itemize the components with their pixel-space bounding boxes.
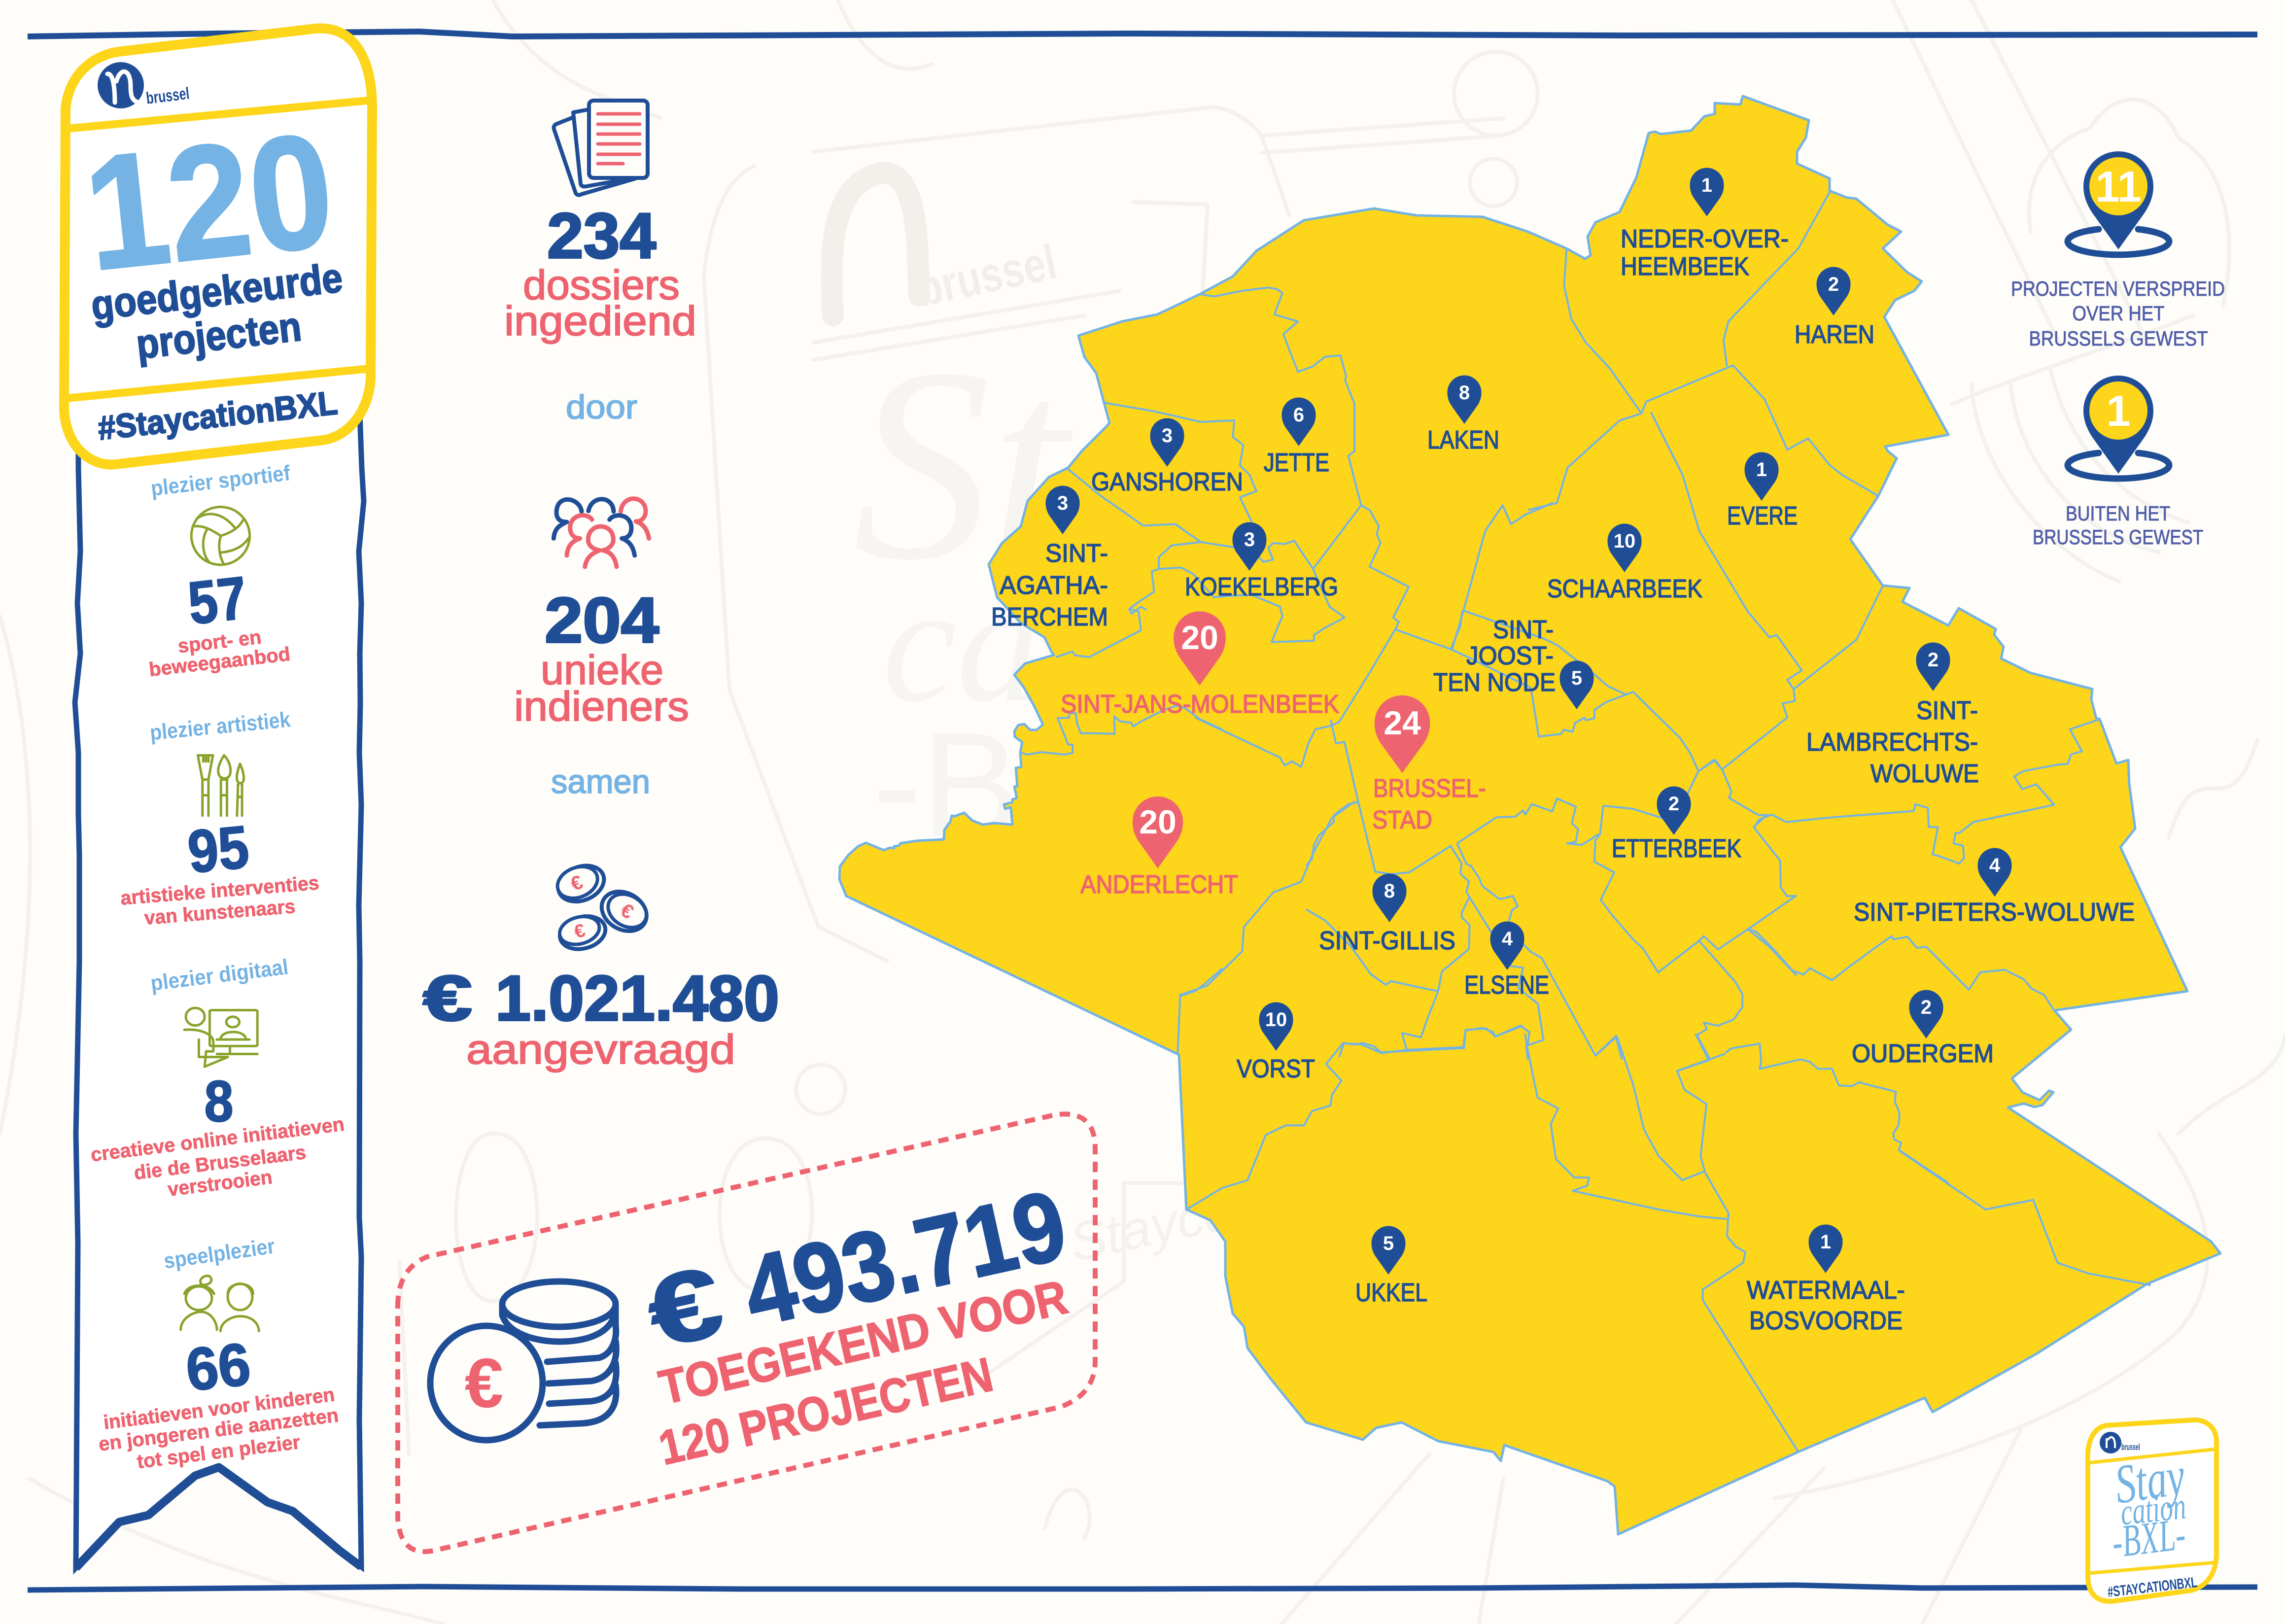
logo wordmark bbox=[2109, 1445, 2188, 1567]
number 234: 234 bbox=[547, 200, 656, 272]
ribbon panel bbox=[75, 414, 364, 1568]
icon: pin 11: 11 bbox=[2095, 162, 2142, 211]
map: municipality labels: JETTE bbox=[1264, 449, 1329, 477]
map: blue location pins: 3 bbox=[1057, 492, 1068, 514]
map: municipality labels: OUDERGEM bbox=[1852, 1039, 1994, 1068]
map: blue location pins: 1 bbox=[1756, 459, 1767, 481]
map: municipality labels: SINT- bbox=[1493, 616, 1554, 644]
icon: coin stack: € bbox=[465, 1344, 503, 1422]
icon: children bbox=[181, 1276, 259, 1331]
map: municipality labels: WOLUWE bbox=[1870, 760, 1979, 788]
logo mark bbox=[2100, 1432, 2121, 1453]
legend: projects outside Brussels region: BRUSSELS GEWEST bbox=[2033, 525, 2203, 549]
callout: awarded amount: 120 PROJECTEN bbox=[654, 1347, 998, 1475]
map: municipality labels: KOEKELBERG bbox=[1185, 573, 1338, 601]
icon: pin 1 bbox=[2068, 376, 2169, 479]
map: municipality labels: SINT-JANS-MOLENBEEK bbox=[1061, 690, 1339, 719]
icon: people bbox=[554, 499, 649, 567]
description: sport- en bbox=[177, 626, 262, 657]
map: blue location pins: 2 bbox=[1928, 649, 1939, 671]
map of Brussels bbox=[839, 96, 2220, 1534]
amount requested: € bbox=[423, 962, 472, 1034]
map: municipality labels: BRUSSEL- bbox=[1373, 774, 1486, 803]
icon: documents bbox=[554, 101, 648, 195]
map: municipality labels: NEDER-OVER- bbox=[1621, 225, 1789, 253]
ribbon shape bbox=[75, 414, 364, 1568]
map: blue location pins: 4 bbox=[1989, 855, 2001, 876]
number 8: 8 bbox=[204, 1069, 234, 1134]
category: plezier artistiek bbox=[120, 707, 320, 929]
stat: dossiers bbox=[504, 101, 696, 344]
map: blue location pins: 2 bbox=[1828, 274, 1839, 295]
icon: coins: € bbox=[617, 899, 637, 924]
dashed frame bbox=[398, 1114, 1095, 1552]
map: municipality labels: EVERE bbox=[1727, 502, 1798, 530]
logo wordmark: Stay bbox=[2111, 1445, 2188, 1516]
legend text: PROJECTEN VERSPREID bbox=[2011, 277, 2225, 300]
label: unieke bbox=[541, 647, 663, 693]
map: municipality labels bbox=[991, 225, 2135, 1335]
amount awarded: 493.719 bbox=[734, 1170, 1075, 1348]
number 95: 95 bbox=[185, 813, 252, 886]
small Staycation BXL logo bbox=[2088, 1420, 2216, 1601]
category: speelplezier: speelplezier bbox=[162, 1234, 277, 1274]
category: plezier digitaal: die de Brusselaars bbox=[133, 1141, 307, 1184]
category: plezier artistiek: van kunstenaars bbox=[143, 896, 296, 929]
map: municipality labels: LAKEN bbox=[1427, 426, 1499, 454]
connector: samen: samen bbox=[551, 763, 650, 800]
logo hashtag: #STAYCATIONBXL bbox=[2107, 1574, 2198, 1600]
headline number 120: 120 bbox=[77, 99, 341, 305]
amount awarded bbox=[638, 1170, 1075, 1369]
map: municipality labels: UKKEL bbox=[1355, 1278, 1427, 1307]
amount awarded: € bbox=[638, 1246, 731, 1369]
legend: projects across Brussels region: OVER HET bbox=[2072, 302, 2165, 325]
label: dossiers bbox=[523, 262, 680, 308]
map: municipality labels: SINT-GILLIS bbox=[1319, 927, 1455, 955]
map: municipality labels: WATERMAAL- bbox=[1747, 1276, 1905, 1305]
map: blue location pins: 1 bbox=[1820, 1231, 1831, 1253]
icon: online person at screen bbox=[184, 1008, 257, 1067]
logo wordmark: -BXL- bbox=[2109, 1508, 2188, 1567]
map: blue location pins: 4 bbox=[1502, 928, 1513, 950]
category: plezier digitaal: verstrooien bbox=[167, 1166, 274, 1201]
map: blue location pins: 8 bbox=[1459, 382, 1470, 404]
background sketch illustration: -B bbox=[872, 701, 1020, 867]
category: plezier digitaal bbox=[90, 955, 346, 1201]
map: region outline bbox=[839, 96, 2220, 1534]
map: blue location pins: 5 bbox=[1383, 1233, 1394, 1254]
map: municipality labels: HEEMBEEK bbox=[1621, 252, 1749, 281]
map: blue location pins: 1 bbox=[1701, 174, 1712, 196]
map: blue location pins: 6 bbox=[1293, 404, 1304, 426]
ribbon notch bbox=[76, 1467, 361, 1568]
category: speelplezier bbox=[98, 1234, 340, 1473]
connector: door: door bbox=[566, 388, 637, 426]
stat: indieners: indieners bbox=[514, 683, 689, 729]
category: plezier sportief bbox=[148, 461, 292, 681]
map: blue location pins: 2 bbox=[1668, 793, 1679, 815]
map: municipality labels: STAD bbox=[1372, 806, 1432, 834]
background sketch illustration: ca bbox=[882, 551, 1040, 736]
logo frame bbox=[2088, 1420, 2216, 1601]
badge dividers bbox=[67, 101, 368, 129]
legend: projects outside Brussels region bbox=[2033, 376, 2203, 549]
hashtag: #StaycationBXL bbox=[96, 384, 339, 447]
callout: awarded amount bbox=[398, 1114, 1095, 1552]
map: blue location pins: 8 bbox=[1384, 880, 1395, 902]
map: municipality labels: GANSHOREN bbox=[1091, 468, 1243, 496]
map: municipality labels: VORST bbox=[1237, 1055, 1315, 1083]
icon: pin 1: 1 bbox=[2107, 386, 2130, 435]
label: aangevraagd bbox=[466, 1026, 735, 1072]
icon: brushes bbox=[198, 755, 244, 816]
map: municipality labels: HAREN bbox=[1795, 320, 1874, 349]
background sketch illustration: Staycation bbox=[1064, 1161, 1324, 1273]
number 57: 57 bbox=[185, 564, 250, 637]
logo: n brussel: brussel bbox=[145, 84, 190, 108]
map: blue location pins: 3 bbox=[1244, 529, 1255, 551]
projecten: projecten bbox=[134, 303, 304, 368]
background sketch illustration: brussel bbox=[912, 234, 1061, 317]
map: municipality borders bbox=[1020, 192, 2151, 1452]
category: plezier artistiek: plezier artistiek bbox=[149, 707, 292, 745]
map: municipality labels: BERCHEM bbox=[991, 603, 1108, 631]
legend text: BUITEN HET bbox=[2066, 502, 2170, 525]
map: blue location pins: 3 bbox=[1162, 425, 1173, 447]
map: municipality labels: LAMBRECHTS- bbox=[1806, 728, 1978, 757]
number 66: 66 bbox=[183, 1330, 253, 1404]
map: municipality labels: AGATHA- bbox=[1000, 571, 1108, 600]
description: creatieve online initiatieven bbox=[90, 1113, 346, 1166]
stat: dossiers: ingediend bbox=[504, 298, 696, 344]
logo: n brussel bbox=[98, 62, 190, 108]
bottom rule bbox=[28, 1585, 2257, 1590]
award label: TOEGEKEND VOOR bbox=[654, 1270, 1073, 1415]
map: municipality labels: ETTERBEEK bbox=[1612, 834, 1741, 863]
icon: pin 11 bbox=[2068, 151, 2169, 255]
description: initiatieven voor kinderen bbox=[102, 1383, 336, 1434]
small Staycation BXL logo: brussel bbox=[2121, 1442, 2140, 1452]
map: municipality labels: SINT- bbox=[1916, 696, 1978, 725]
map: municipality labels: ANDERLECHT bbox=[1080, 870, 1238, 899]
icon: coin stack bbox=[430, 1281, 616, 1440]
icon: coins: € bbox=[572, 920, 588, 943]
legend: projects across Brussels region bbox=[2011, 151, 2225, 350]
top rule bbox=[28, 32, 2257, 36]
stat: indieners bbox=[514, 499, 689, 729]
amount requested: 1.021.480 bbox=[495, 962, 779, 1034]
category: plezier sportief: beweegaanbod bbox=[148, 643, 291, 681]
map: blue location pins: 5 bbox=[1571, 667, 1582, 689]
category: plezier sportief: plezier sportief bbox=[149, 461, 292, 501]
map: blue location pins: 2 bbox=[1921, 997, 1932, 1018]
icon: coins bbox=[553, 859, 654, 954]
map: red location pins bbox=[1133, 611, 1430, 868]
map: red location pins: 20 bbox=[1139, 803, 1177, 841]
badge frame bbox=[64, 29, 372, 465]
map: blue location pins: 10 bbox=[1265, 1009, 1287, 1031]
stat: aangevraagd bbox=[423, 859, 779, 1072]
category: speelplezier: en jongeren die aanzetten bbox=[98, 1404, 340, 1455]
badge: 120 goedgekeurde projecten bbox=[64, 29, 372, 465]
map: municipality labels: SINT-PIETERS-WOLUWE bbox=[1854, 898, 2135, 927]
category: plezier digitaal: plezier digitaal bbox=[149, 955, 290, 996]
icon: volleyball bbox=[191, 507, 250, 565]
number 204: 204 bbox=[545, 584, 659, 656]
map: municipality labels: JOOST- bbox=[1466, 642, 1554, 670]
map: blue location pins bbox=[1046, 168, 2012, 1275]
logo wordmark: cation bbox=[2118, 1485, 2188, 1533]
map: municipality labels: ELSENE bbox=[1464, 971, 1549, 1000]
icon: coins: € bbox=[568, 871, 586, 896]
map: municipality labels: BOSVOORDE bbox=[1749, 1307, 1903, 1335]
map: blue location pins: 10 bbox=[1614, 530, 1635, 552]
map: municipality labels: TEN NODE bbox=[1433, 668, 1556, 697]
map: red location pins: 20 bbox=[1181, 619, 1218, 657]
map: municipality labels: SCHAARBEEK bbox=[1547, 575, 1702, 603]
description: artistieke interventies bbox=[120, 872, 320, 909]
category: speelplezier: tot spel en plezier bbox=[136, 1431, 301, 1473]
map: municipality labels: SINT- bbox=[1045, 539, 1108, 568]
legend: projects across Brussels region: BRUSSELS GEWEST bbox=[2029, 327, 2208, 350]
map: red location pins: 24 bbox=[1384, 704, 1421, 742]
goedgekeurde: goedgekeurde bbox=[89, 254, 345, 329]
background sketch illustration: Sta bbox=[853, 311, 1206, 617]
